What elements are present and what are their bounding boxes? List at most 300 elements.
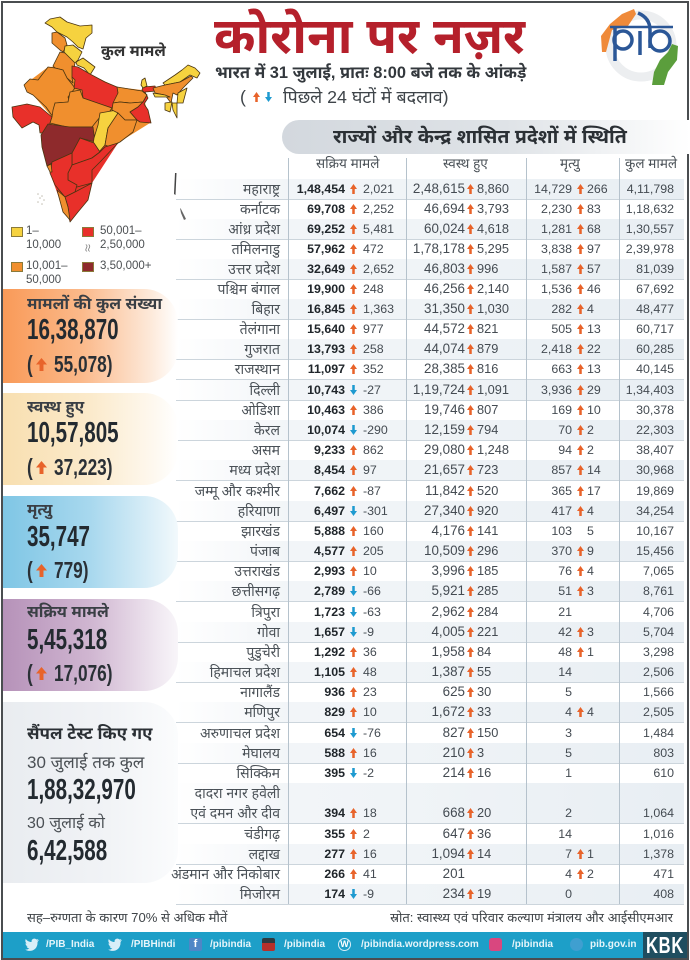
row: Delhi: 1,19,724: [413, 382, 465, 397]
row: Rajasthan: [176, 364, 684, 380]
row: Andhra Pradesh: 4,618: [477, 221, 509, 236]
row: Rajasthan: 28,385: [424, 361, 465, 376]
row: Andaman and Nicobar: 266: [324, 867, 345, 881]
row: Gujarat: 13,793: [307, 342, 345, 356]
row: Karnataka: कर्नाटक: [240, 201, 280, 217]
row: Jammu and Kashmir: [194, 483, 674, 500]
row: Dadra Nagar Haveli: 18: [363, 806, 377, 820]
row: Odisha: 30,378: [636, 403, 674, 417]
row: Arunachal Pradesh: 150: [477, 725, 498, 740]
row: Manipur: 2,505: [643, 705, 674, 719]
row: Tamil Nadu: [232, 241, 674, 258]
row: Gujarat: 258: [363, 342, 384, 356]
row: Telangana: 505: [551, 322, 572, 336]
panel: total cases: 55,078): [54, 351, 113, 377]
row: Puducherry: [246, 644, 674, 661]
row: Gujarat: 2,418: [541, 342, 572, 356]
row: Madhya Pradesh: 14: [587, 463, 601, 477]
row: Puducherry: 3,298: [643, 645, 674, 659]
row: Maharashtra: 8,860: [477, 181, 509, 196]
row: Telangana: 15,640: [307, 322, 345, 336]
row: Tripura: -63: [363, 605, 381, 619]
row: Jharkhand: 160: [363, 524, 384, 538]
row: Chandigarh: 2: [363, 827, 370, 841]
row: Odisha: 169: [551, 403, 572, 417]
panel: recovered: [3, 393, 178, 485]
row: Haryana: -301: [363, 504, 388, 518]
icon: twitter: [108, 938, 122, 951]
row: Tripura: त्रिपुरा: [251, 604, 280, 620]
KBK badge: KBK: [646, 932, 684, 958]
panel: sample tests: 1,88,32,970: [27, 774, 136, 806]
row: Ladakh: 1,094: [431, 846, 465, 861]
row: Bihar: 4: [587, 302, 594, 316]
row: Andhra Pradesh: 1,30,557: [626, 222, 674, 236]
row: Tripura: 284: [477, 604, 498, 619]
row: Jharkhand: 10,167: [636, 524, 674, 538]
row: Sikkim: 16: [477, 765, 491, 780]
row: Assam: 94: [558, 443, 572, 457]
row: Puducherry: 1: [587, 645, 594, 659]
row: Manipur: 33: [477, 704, 491, 719]
row: Ladakh: 14: [477, 846, 491, 861]
row: Odisha: 386: [363, 403, 384, 417]
row: Himachal Pradesh: 1,387: [431, 664, 465, 679]
row: Goa: 42: [558, 625, 572, 639]
row: Karnataka: 2,252: [363, 202, 394, 216]
row: Himachal Pradesh: [176, 662, 684, 683]
row: Jharkhand: 141: [477, 523, 498, 538]
row: Goa: [176, 622, 684, 643]
row: Mizoram: 408: [653, 887, 674, 901]
row: Andaman and Nicobar: 41: [363, 867, 377, 881]
row: Tamil Nadu: 472: [363, 242, 384, 256]
column headers: [316, 156, 678, 172]
icon: wordpress: [338, 938, 351, 951]
legend: 1-10,000: [11, 225, 61, 251]
row: Gujarat: 60,285: [636, 342, 674, 356]
row: Andaman and Nicobar: [172, 866, 674, 880]
row: Assam: 9,233: [314, 443, 345, 457]
row: Tripura: 2,962: [431, 604, 465, 619]
footer handle: /PIB_India: [46, 939, 94, 950]
row: Tamil Nadu: 1,78,178: [413, 241, 465, 256]
row: Rajasthan: 816: [477, 361, 498, 376]
icon: globe: [570, 938, 583, 951]
row: Telangana: 60,717: [636, 322, 674, 336]
row: Tamil Nadu: 3,838: [541, 242, 572, 256]
row: Goa: 221: [477, 624, 498, 639]
legend: 3,50,000+: 3,50,000+: [100, 260, 151, 272]
row: Andhra Pradesh: 5,481: [363, 222, 394, 236]
row: Punjab: पंजाब: [250, 543, 280, 559]
row: Punjab: 9: [587, 544, 594, 558]
row: Manipur: 829: [324, 705, 345, 719]
row: Uttar Pradesh: 57: [587, 262, 601, 276]
legend: [11, 225, 151, 286]
row: Kerala: 70: [558, 423, 572, 437]
row: Himachal Pradesh: हिमाचल प्रदेश: [210, 664, 280, 680]
row: Tamil Nadu: 5,295: [477, 241, 509, 256]
row: Mizoram: 0: [565, 887, 572, 901]
row: Punjab: 296: [477, 543, 498, 558]
footer social bar: [3, 932, 687, 958]
row: Madhya Pradesh: 8,454: [314, 463, 345, 477]
row: Haryana: 920: [477, 503, 498, 518]
row: Odisha: [242, 402, 674, 416]
row: Odisha: 10: [587, 403, 601, 417]
row: Jharkhand: झारखंड: [241, 523, 280, 539]
row: Madhya Pradesh: 21,657: [424, 462, 465, 477]
row: West Bengal: 1,536: [541, 282, 572, 296]
row: Uttar Pradesh: 996: [477, 261, 498, 276]
row: Karnataka: 1,18,632: [626, 202, 674, 216]
change note: (: [240, 87, 246, 107]
row: Haryana: 6,497: [314, 504, 345, 518]
legend: 1-10,000: 1–: [26, 225, 39, 237]
row: Maharashtra: 2,48,615: [413, 181, 465, 196]
row: Meghalaya: 5: [565, 746, 572, 760]
row: Mizoram: 19: [477, 886, 491, 901]
row: Jammu and Kashmir: जम्मू और कश्मीर: [195, 483, 280, 499]
legend: 10,001-50,000: 10,001–: [26, 260, 68, 272]
panel: active cases: (: [27, 660, 33, 686]
panel: total cases: 16,38,870: [27, 314, 119, 346]
row: Andhra Pradesh: 60,024: [424, 221, 465, 236]
row: Jammu and Kashmir: 7,662: [314, 484, 345, 498]
row: Uttar Pradesh: 46,803: [424, 261, 465, 276]
row: Chhattisgarh: 2,789: [314, 584, 345, 598]
row: Bihar: 1,363: [363, 302, 394, 316]
row: Chhattisgarh: [176, 581, 684, 602]
row: Ladakh: 277: [324, 847, 345, 861]
row: Ladakh: 7: [565, 847, 572, 861]
icon: PIB logo: [601, 9, 678, 85]
row: Karnataka: 3,793: [477, 201, 509, 216]
row: Uttarakhand: 7,065: [643, 564, 674, 578]
panel: recovered: (: [27, 454, 33, 480]
legend: 50,001-2,50,000: 2,50,000: [100, 239, 145, 251]
row: Madhya Pradesh: [176, 460, 684, 481]
row: Jammu and Kashmir: 365: [551, 484, 572, 498]
row: Maharashtra: 266: [587, 182, 608, 196]
row: Arunachal Pradesh: अरुणाचल प्रदेश: [200, 725, 280, 741]
row: Assam: असम: [251, 442, 280, 458]
panel: deaths: मृत्यु: [27, 502, 52, 519]
row: Goa: -9: [363, 625, 374, 639]
row: West Bengal: 46: [587, 282, 601, 296]
row: Kerala: 12,159: [424, 422, 465, 437]
row: Haryana: [176, 501, 684, 522]
row: Assam: 2: [587, 443, 594, 457]
row: Himachal Pradesh: 48: [363, 665, 377, 679]
row: Jammu and Kashmir: -87: [363, 484, 381, 498]
row: Arunachal Pradesh: -76: [363, 726, 381, 740]
row: Punjab: 15,456: [636, 544, 674, 558]
row: Manipur: 4: [565, 705, 572, 719]
row: Chhattisgarh: 285: [477, 583, 498, 598]
row: Rajasthan: 352: [363, 362, 384, 376]
row: Jharkhand: 5,888: [314, 524, 345, 538]
row: Odisha: 10,463: [307, 403, 345, 417]
row: Delhi: 1,34,403: [626, 383, 674, 397]
row: Delhi: -27: [363, 383, 381, 397]
row: Sikkim: -2: [363, 766, 374, 780]
legend: 50,001-2,50,000: [82, 225, 145, 254]
row: Assam: 38,407: [636, 443, 674, 457]
footer handle: /pibindia: [210, 939, 251, 950]
row: Madhya Pradesh: मध्य प्रदेश: [229, 462, 280, 478]
row: Chhattisgarh: 51: [558, 584, 572, 598]
row: Punjab: 370: [551, 544, 572, 558]
table heading pill: राज्यों और केन्द्र शासित प्रदेशों में स्थिति: [333, 126, 627, 148]
row: Assam: 862: [363, 443, 384, 457]
row: Dadra Nagar Haveli: [176, 783, 684, 824]
row: West Bengal: 46,256: [424, 281, 465, 296]
row: Chhattisgarh: 5,921: [431, 583, 465, 598]
row: Chhattisgarh: -66: [363, 584, 381, 598]
row: Delhi: 29: [587, 383, 601, 397]
choropleth map of India: [12, 16, 200, 222]
row: Ladakh: 1,378: [643, 847, 674, 861]
row: Arunachal Pradesh: [200, 725, 674, 739]
panel: recovered: 10,57,805: [27, 417, 119, 449]
row: Delhi: दिल्ली: [250, 382, 280, 398]
row: Chandigarh: 14: [558, 827, 572, 841]
row: Kerala: 10,074: [307, 423, 345, 437]
row: Manipur: 4: [587, 705, 594, 719]
row: Chandigarh: चंडीगढ़: [244, 826, 280, 842]
row: Meghalaya: मेघालय: [242, 745, 280, 761]
row: Tamil Nadu: 57,962: [307, 242, 345, 256]
row: Tripura: [251, 604, 674, 621]
row: West Bengal: [218, 281, 674, 295]
row: Himachal Pradesh: 14: [558, 665, 572, 679]
row: Nagaland: नागालैंड: [240, 684, 280, 700]
panel: deaths: 779): [54, 557, 89, 583]
row: Delhi: 1,091: [477, 382, 509, 397]
map: Andaman and Nicobar islands: [174, 173, 186, 220]
row: Uttarakhand: 3,996: [431, 563, 465, 578]
icon: youtube: [262, 938, 275, 951]
row: Ladakh: 16: [363, 847, 377, 861]
row: Bihar: 1,030: [477, 301, 509, 316]
row: Mizoram: 234: [443, 886, 465, 901]
subtitle: भारत में 31 जुलाई, प्रातः 8:00 बजे तक के आंकड़े: [215, 64, 526, 82]
panel: active cases: [3, 599, 178, 691]
row: Haryana: 417: [551, 504, 572, 518]
row: Assam: 29,080: [424, 442, 465, 457]
row: Haryana: 27,340: [424, 503, 465, 518]
row: Himachal Pradesh: 1,105: [314, 665, 345, 679]
row: Gujarat: गुजरात: [244, 341, 280, 357]
row: Gujarat: 879: [477, 341, 498, 356]
row: Nagaland: 30: [477, 684, 491, 699]
panel: sample tests: सैंपल टेस्ट किए गए: [27, 724, 152, 743]
row: Goa: 4,005: [431, 624, 465, 639]
footer handle: /pibindia: [512, 939, 553, 950]
row: Nagaland: [240, 684, 674, 698]
row: Meghalaya: 3: [477, 745, 484, 760]
row: Rajasthan: राजस्थान: [235, 361, 280, 377]
row: Andaman and Nicobar: 471: [653, 867, 674, 881]
icon: facebook: [189, 938, 202, 951]
row: Telangana: 821: [477, 321, 498, 336]
row: Rajasthan: 11,097: [308, 362, 345, 376]
row: Andaman and Nicobar: 201: [443, 866, 465, 881]
row: West Bengal: 2,140: [477, 281, 509, 296]
row: Goa: 3: [587, 625, 594, 639]
panel: deaths: [3, 496, 178, 588]
row: Meghalaya: 588: [324, 746, 345, 760]
row: Puducherry: 36: [363, 645, 377, 659]
row: Uttarakhand: [234, 564, 674, 577]
panel: active cases: सक्रिय मामले: [27, 604, 109, 621]
column headers: कुल मामले: [625, 156, 677, 171]
column headers: स्वस्थ हुए: [443, 156, 488, 171]
row: Ladakh: लद्दाख: [249, 846, 280, 862]
row: West Bengal: 67,692: [636, 282, 674, 296]
row: Karnataka: 69,708: [307, 202, 345, 216]
panel: deaths: (: [27, 557, 33, 583]
row: Andhra Pradesh: 69,252: [307, 222, 345, 236]
row: Jharkhand: 103: [551, 524, 572, 538]
row: Madhya Pradesh: 723: [477, 462, 498, 477]
row: Chhattisgarh: 3: [587, 584, 594, 598]
table heading pill: [282, 120, 690, 154]
row: Maharashtra: 2,021: [363, 182, 394, 196]
row: Andaman and Nicobar: 2: [587, 867, 594, 881]
row: Chhattisgarh: छत्तीसगढ़: [232, 583, 280, 599]
row: Gujarat: 22: [587, 342, 601, 356]
row: Gujarat: [176, 339, 684, 360]
row: Sikkim: सिक्किम: [237, 765, 280, 781]
row: Punjab: [176, 541, 684, 562]
row: Dadra Nagar Haveli: दादरा नगर हवेली: [195, 785, 280, 801]
row: Sikkim: 214: [443, 765, 465, 780]
row: Punjab: 205: [363, 544, 384, 558]
row: Jharkhand: 4,176: [431, 523, 465, 538]
row: Bihar: 282: [551, 302, 572, 316]
row: Madhya Pradesh: 857: [551, 463, 572, 477]
row: Kerala: केरल: [254, 422, 280, 438]
note: comorbidity: सह–रुग्णता के कारण 70% से अधिक मौतें: [27, 910, 227, 925]
row: Chandigarh: [244, 826, 674, 842]
row: Maharashtra: 1,48,454: [297, 182, 345, 196]
row: Rajasthan: 13: [587, 362, 601, 376]
row: Punjab: 10,509: [424, 543, 465, 558]
panel: sample tests: 30 जुलाई तक कुल: [27, 753, 144, 772]
row: Puducherry: 84: [477, 644, 491, 659]
row: Jharkhand: 5: [587, 524, 594, 538]
row: Delhi: 3,936: [541, 383, 572, 397]
row: Dadra Nagar Haveli: एवं दमन और दीव: [190, 805, 280, 821]
row: Uttar Pradesh: 2,652: [363, 262, 394, 276]
row: Telangana: 44,572: [424, 321, 465, 336]
row: Ladakh: 1: [587, 847, 594, 861]
row: Nagaland: 625: [443, 684, 465, 699]
row: Meghalaya: [176, 743, 684, 764]
row: Chandigarh: 647: [443, 826, 465, 841]
row: Sikkim: 610: [653, 766, 674, 780]
row: Uttarakhand: 2,993: [314, 564, 345, 578]
row: Chhattisgarh: 8,761: [643, 584, 674, 598]
row: Tamil Nadu: तमिलनाडु: [232, 241, 280, 257]
panel: total cases: मामलों की कुल संख्या: [27, 296, 162, 313]
row: Bihar: 16,845: [307, 302, 345, 316]
row: Assam: 1,248: [477, 442, 509, 457]
row: Jammu and Kashmir: 17: [587, 484, 601, 498]
row: Ladakh: [176, 844, 684, 865]
row: Karnataka: [240, 202, 674, 215]
row: Manipur: [176, 702, 684, 723]
row: Punjab: 4,577: [314, 544, 345, 558]
row: Sikkim: [236, 765, 674, 778]
row: Jammu and Kashmir: 520: [477, 483, 498, 498]
row: Karnataka: 83: [587, 202, 601, 216]
footer handle: pib.gov.in: [590, 939, 636, 950]
change note: पिछले 24 घंटों में बदलाव): [283, 87, 449, 107]
panel: sample tests: [3, 702, 178, 883]
row: Dadra Nagar Haveli: 668: [443, 805, 465, 820]
row: Nagaland: 936: [324, 685, 345, 699]
row: Bihar: 48,477: [636, 302, 674, 316]
row: Mizoram: -9: [363, 887, 374, 901]
panel: active cases: 17,076): [54, 660, 113, 686]
legend: 50,001-2,50,000: 50,001–: [100, 225, 142, 237]
row: Arunachal Pradesh: 3: [565, 726, 572, 740]
row: Dadra Nagar Haveli: 2: [565, 806, 572, 820]
row: Gujarat: 44,074: [424, 341, 465, 356]
row: Manipur: 1,672: [431, 704, 465, 719]
row: Chandigarh: 36: [477, 826, 491, 841]
row: Jammu and Kashmir: 11,842: [425, 483, 465, 498]
panel: active cases: 5,45,318: [27, 624, 107, 656]
panel: deaths: 35,747: [27, 521, 90, 553]
row: Mizoram: [176, 884, 684, 905]
row: Himachal Pradesh: 55: [477, 664, 491, 679]
row: Mizoram: मिजोरम: [240, 886, 280, 902]
legend: 10,001-50,000: [11, 260, 68, 286]
panel: recovered: 37,223): [54, 454, 113, 480]
row: Uttarakhand: 4: [587, 564, 594, 578]
row: Andhra Pradesh: [176, 219, 684, 240]
row: Tamil Nadu: 97: [587, 242, 601, 256]
row: Goa: गोवा: [257, 624, 280, 640]
row: Puducherry: 48: [558, 645, 572, 659]
icon: facebook: f: [194, 938, 197, 950]
row: Karnataka: 2,230: [541, 202, 572, 216]
row: Madhya Pradesh: 30,968: [636, 463, 674, 477]
row: Andaman and Nicobar: 4: [565, 867, 572, 881]
row: Nagaland: 23: [363, 685, 377, 699]
icon: wordpress: W: [340, 939, 349, 949]
row: Andhra Pradesh: 1,281: [541, 222, 572, 236]
row: Telangana: 13: [587, 322, 601, 336]
note: source: स्रोत: स्वास्थ्य एवं परिवार कल्याण मंत्रालय और आईसीएमआर: [390, 910, 673, 925]
panel: total cases: [3, 289, 178, 383]
row: Delhi: 10,743: [307, 383, 345, 397]
legend: 50,001-2,50,000: ≀≀: [85, 242, 91, 254]
row: Arunachal Pradesh: 827: [443, 725, 465, 740]
footer handle: /PIBHindi: [131, 939, 175, 950]
row: Jharkhand: [241, 524, 674, 538]
panel: recovered: स्वस्थ हुए: [27, 399, 84, 416]
row: Sikkim: 1: [565, 766, 572, 780]
map title: कुल मामले: [101, 43, 166, 60]
panel: sample tests: 30 जुलाई को: [27, 815, 105, 832]
row: Telangana: [240, 321, 674, 335]
